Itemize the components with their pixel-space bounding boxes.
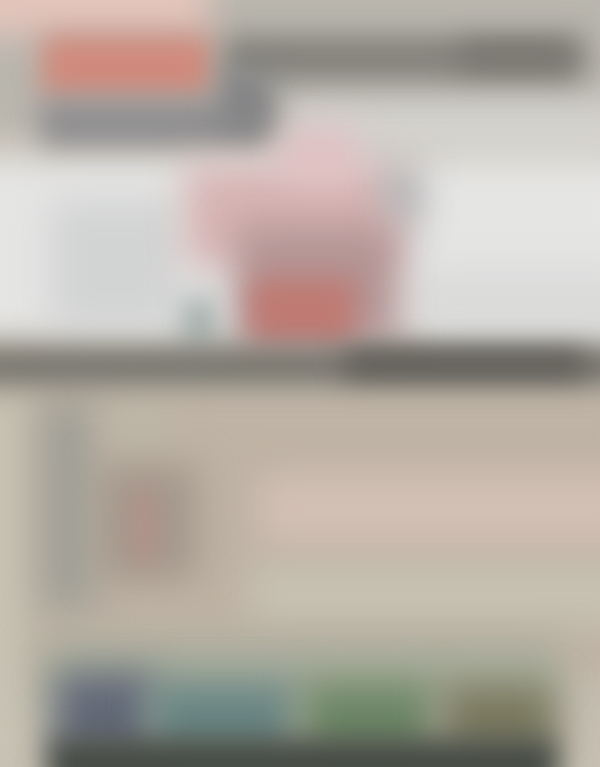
- central pink peak: [285, 130, 355, 185]
- circle element: [105, 400, 175, 455]
- lower panel pink band: [260, 475, 600, 545]
- bar: blue: [55, 672, 153, 757]
- heading bar: [225, 36, 585, 80]
- left vertical element: [40, 400, 95, 610]
- panel: left column: [50, 200, 180, 330]
- red figure accent: [134, 490, 154, 562]
- central rose column: [235, 225, 400, 345]
- panel: header top-left tint: [0, 0, 210, 35]
- panel: main light background: [0, 155, 600, 340]
- central red block: [250, 278, 355, 343]
- panel: light band behind intro: [285, 100, 600, 155]
- bar: green: [303, 682, 433, 757]
- subtitle bar: [40, 100, 270, 146]
- dark divider band: [0, 348, 600, 384]
- grey shade right of the pink shape: [385, 165, 420, 225]
- heading bar dark end: [460, 44, 570, 68]
- panel: header background: [0, 0, 600, 135]
- lower panel light area: [250, 565, 600, 625]
- bottom dark base: [48, 738, 558, 767]
- panel: central pink shape: [185, 165, 395, 265]
- bar: teal: [150, 682, 295, 757]
- panel: right lower column: [420, 270, 600, 340]
- bottom section fade: [40, 640, 560, 725]
- subtitle connector: [220, 70, 270, 128]
- dark divider right: [345, 352, 585, 376]
- bar: olive: [443, 684, 555, 754]
- teal accent: [183, 298, 215, 346]
- center-left figure: [98, 465, 198, 580]
- lower beige panel: [0, 380, 600, 680]
- title block: [42, 35, 212, 97]
- left edge strip: [0, 390, 30, 767]
